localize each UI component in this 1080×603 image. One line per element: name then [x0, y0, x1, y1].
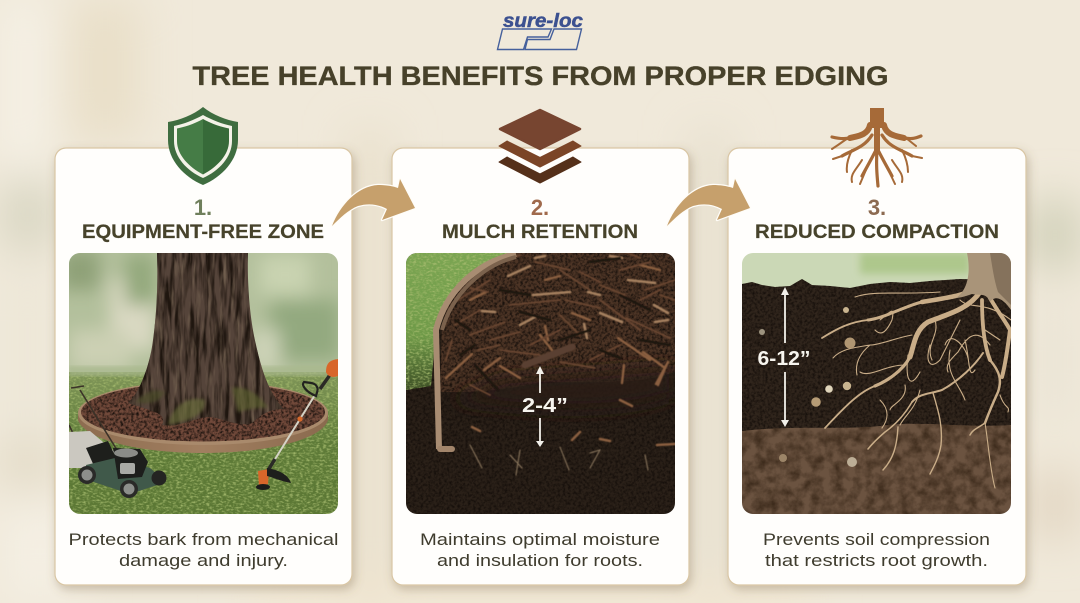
description: Protects bark from mechanical: [68, 530, 338, 549]
pebbles: [759, 307, 857, 467]
photo: tree with edging ring, mower and trimmer: [60, 250, 340, 514]
mulch layer: [440, 253, 675, 392]
title: TREE HEALTH BENEFITS FROM PROPER EDGING: [192, 61, 888, 91]
roots: [822, 285, 1011, 488]
depth marker 6-12 inches: [758, 287, 810, 427]
card background: [392, 148, 689, 585]
heading: EQUIPMENT-FREE ZONE: [82, 222, 324, 243]
topsoil: [742, 279, 1011, 431]
heading: MULCH RETENTION: [442, 222, 638, 243]
description: [68, 530, 338, 570]
depth marker 6-12 inches: 6-12”: [758, 348, 810, 370]
description: Maintains optimal moisture: [420, 530, 660, 549]
depth marker 2-4 inches: [522, 366, 568, 447]
heading: REDUCED COMPACTION: [755, 222, 999, 243]
step number 1: 1.: [194, 195, 212, 220]
description: [420, 530, 660, 570]
description: damage and injury.: [119, 551, 288, 570]
icon: roots: [832, 108, 922, 186]
arrow: step 2 to step 3: [667, 179, 750, 226]
logo mark: [498, 29, 582, 50]
lawn mower: [69, 386, 166, 498]
icon: mulch layers: [499, 110, 581, 183]
description: that restricts root growth.: [765, 551, 988, 570]
step number 2: 2.: [531, 195, 549, 220]
depth marker 2-4 inches: 2-4”: [522, 395, 568, 417]
string trimmer: [256, 359, 338, 490]
arrow: step 1 to step 2: [332, 179, 415, 226]
mulch chips: [446, 250, 675, 475]
card background: [728, 148, 1026, 585]
description: and insulation for roots.: [437, 551, 643, 570]
edging strip: [436, 254, 516, 449]
description: Prevents soil compression: [763, 530, 990, 549]
tree trunk: [128, 253, 284, 426]
panel: mulch retention: [392, 110, 689, 585]
tree base: [956, 253, 1011, 310]
logo: [498, 11, 583, 50]
step number 3: 3.: [868, 195, 886, 220]
card background: [55, 148, 352, 585]
moss: [135, 388, 268, 425]
grass: [406, 253, 512, 390]
panel: reduced compaction: [728, 108, 1026, 585]
panel: equipment-free zone: [55, 107, 352, 585]
photo: soil cross-section with roots: [742, 252, 1011, 514]
logo wordmark: sure-loc: [503, 11, 583, 32]
description: [763, 530, 990, 570]
photo: mulch against edging: [406, 250, 675, 514]
edging ring: [78, 413, 328, 453]
icon: shield: [168, 107, 238, 185]
